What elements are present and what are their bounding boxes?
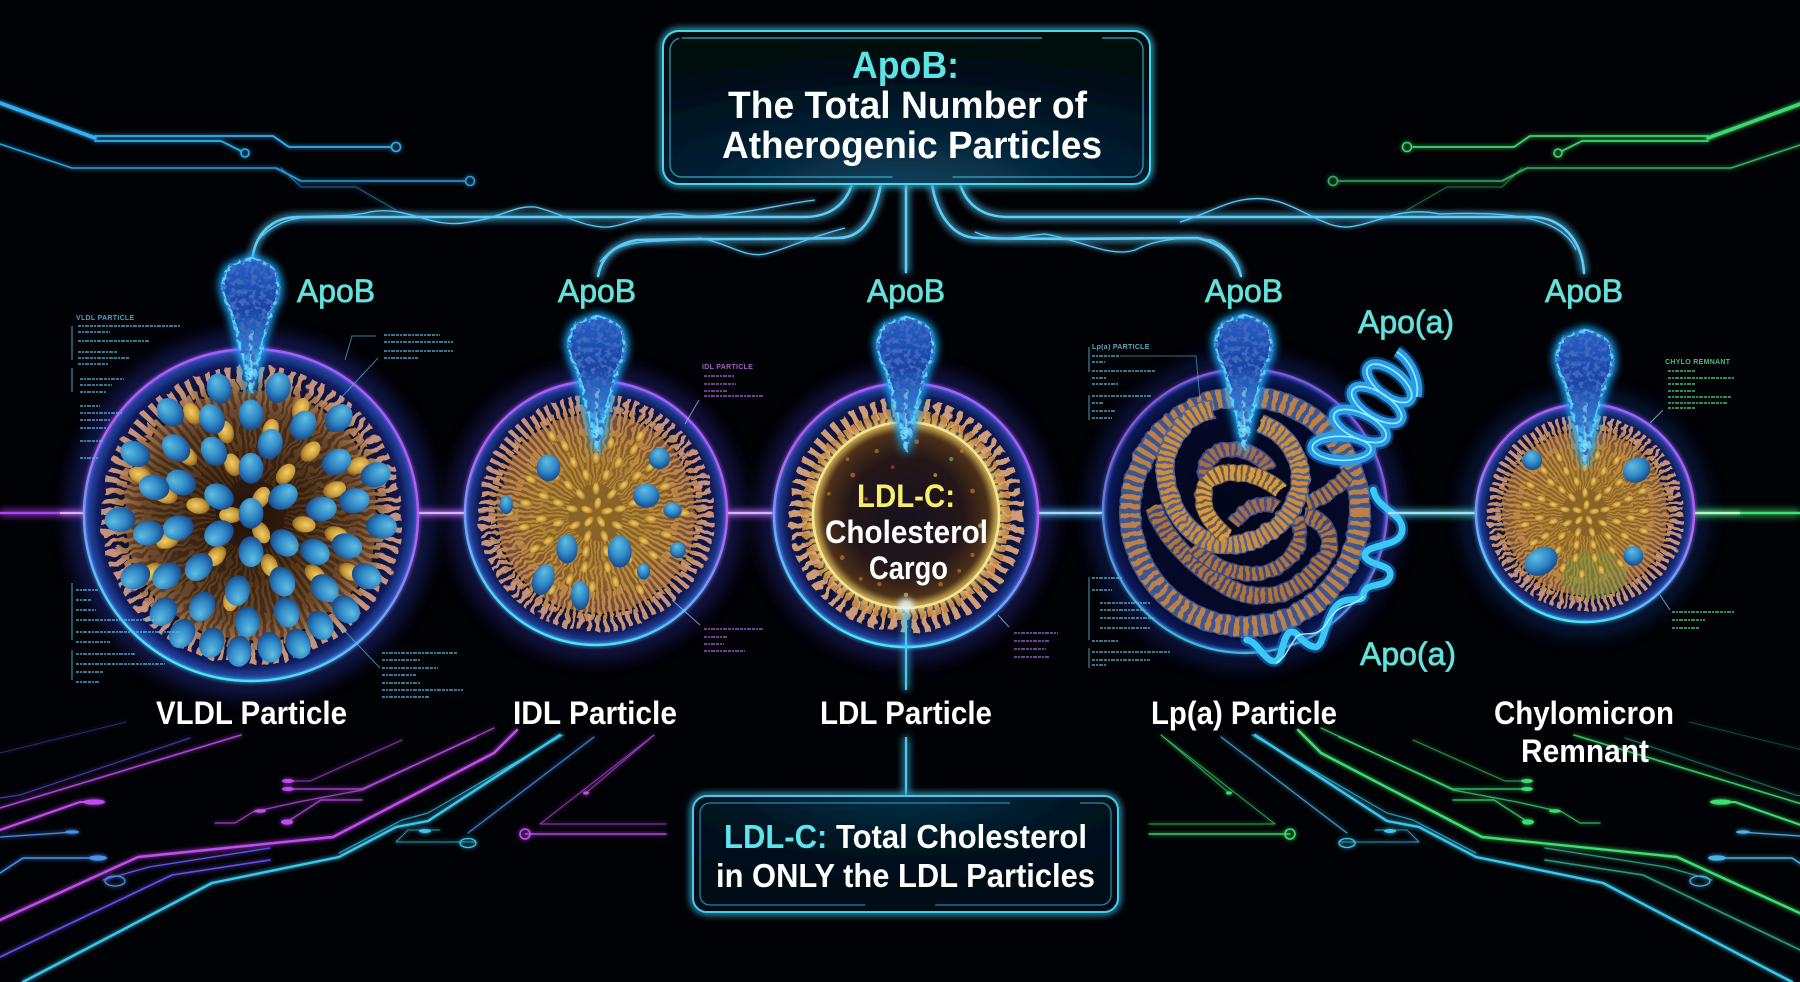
micro annotations: VLDL: VLDL PARTICLE xyxy=(76,315,135,322)
membrane rim xyxy=(1476,404,1694,622)
ApoB protein: Lp(a) xyxy=(1216,316,1271,449)
membrane xyxy=(83,348,419,682)
coiled protein ribbon xyxy=(1130,397,1360,627)
lipid core xyxy=(486,403,706,623)
membrane rim xyxy=(84,349,418,681)
panel: LDL particle xyxy=(773,382,1039,648)
ApoB labels: ApoB xyxy=(867,273,945,309)
membrane rim xyxy=(774,383,1038,647)
ApoB labels: ApoB xyxy=(1545,273,1623,309)
ApoB protein: IDL xyxy=(569,317,624,450)
surface spikes xyxy=(798,407,1014,623)
ApoB protein: Chylomicron remnant xyxy=(1557,331,1612,464)
panel: Chylomicron remnant xyxy=(1475,403,1695,623)
membrane xyxy=(1102,368,1388,654)
ApoB labels xyxy=(297,273,1623,309)
box frame xyxy=(663,31,1150,184)
micro annotations: chylomicron remnant xyxy=(1650,359,1735,628)
panel: VLDL particle xyxy=(83,348,419,682)
micro annotations: Lp(a): Lp(a) PARTICLE xyxy=(1092,344,1150,351)
membrane xyxy=(1475,403,1695,623)
membrane rim xyxy=(465,381,727,645)
title text: Atherogenic Particles xyxy=(722,125,1102,167)
circuit traces: bottom right xyxy=(1149,722,1800,982)
particle name labels xyxy=(156,695,1674,769)
bottom flare xyxy=(898,598,914,614)
micro annotations: chylomicron remnant: CHYLO REMNANT xyxy=(1665,359,1731,366)
particle name labels: LDL Particle xyxy=(820,695,992,731)
callout: LDL-C definition box xyxy=(693,796,1118,912)
core glow ring xyxy=(813,422,999,608)
panel: Lp(a) particle xyxy=(1102,368,1388,654)
cargo speckles xyxy=(827,439,983,597)
title text: ApoB: xyxy=(852,45,959,87)
membrane rim xyxy=(1103,369,1387,653)
horizontal energy line xyxy=(0,512,1800,514)
callout text: in ONLY the LDL Particles xyxy=(716,857,1095,894)
Apo(a) labels xyxy=(1358,304,1456,672)
particle name labels: Lp(a) Particle xyxy=(1151,695,1337,731)
particle name labels: Remnant xyxy=(1521,733,1649,769)
connector: LDL particle to LDL-C box xyxy=(905,613,907,796)
wavy energy strands xyxy=(258,199,1576,270)
icon: Apo(a) wavy strand xyxy=(1247,490,1402,663)
ApoB protein: LDL xyxy=(878,318,933,451)
ApoB labels: ApoB xyxy=(1205,273,1283,309)
circuit traces: top right xyxy=(1328,103,1800,210)
micro annotations: IDL: IDL PARTICLE xyxy=(702,364,753,371)
title box xyxy=(663,31,1150,184)
particle halos xyxy=(79,344,1699,686)
ApoB protein: VLDL xyxy=(223,259,278,392)
circuit traces: top left xyxy=(0,103,474,210)
lipid core xyxy=(1494,422,1676,604)
ApoB labels: ApoB xyxy=(558,273,636,309)
icon: Apo(a) helix coil xyxy=(1312,352,1418,461)
LDL-C cargo text: Cargo xyxy=(869,550,948,586)
LDL-C cargo text: LDL-C: xyxy=(857,478,955,514)
lipid core xyxy=(104,370,398,668)
particle name labels: IDL Particle xyxy=(513,695,677,731)
panel: IDL particle xyxy=(464,380,728,646)
circuit traces: bottom left xyxy=(0,722,666,982)
Apo(a) labels: Apo(a) xyxy=(1358,304,1454,340)
title text xyxy=(722,45,1102,167)
micro annotations: IDL xyxy=(672,364,763,651)
callout text: LDL-C: Total Cholesterol xyxy=(724,818,1087,855)
membrane xyxy=(773,382,1039,648)
box frame xyxy=(693,796,1118,912)
particle name labels: VLDL Particle xyxy=(156,695,347,731)
Apo(a) labels: Apo(a) xyxy=(1360,636,1456,672)
connector lines from title box to particles xyxy=(252,184,1584,276)
membrane xyxy=(464,380,728,646)
title text: The Total Number of xyxy=(728,85,1087,127)
particle name labels: Chylomicron xyxy=(1494,695,1674,731)
ApoB labels: ApoB xyxy=(297,273,375,309)
micro annotations: Lp(a) xyxy=(1089,344,1200,668)
LDL-C cargo text xyxy=(825,478,988,586)
micro annotations: VLDL xyxy=(72,315,463,697)
LDL-C cargo text: Cholesterol xyxy=(825,514,988,550)
micro annotations: LDL xyxy=(998,615,1058,657)
callout text xyxy=(716,818,1095,894)
horizontal line flares between particles xyxy=(60,512,1740,514)
